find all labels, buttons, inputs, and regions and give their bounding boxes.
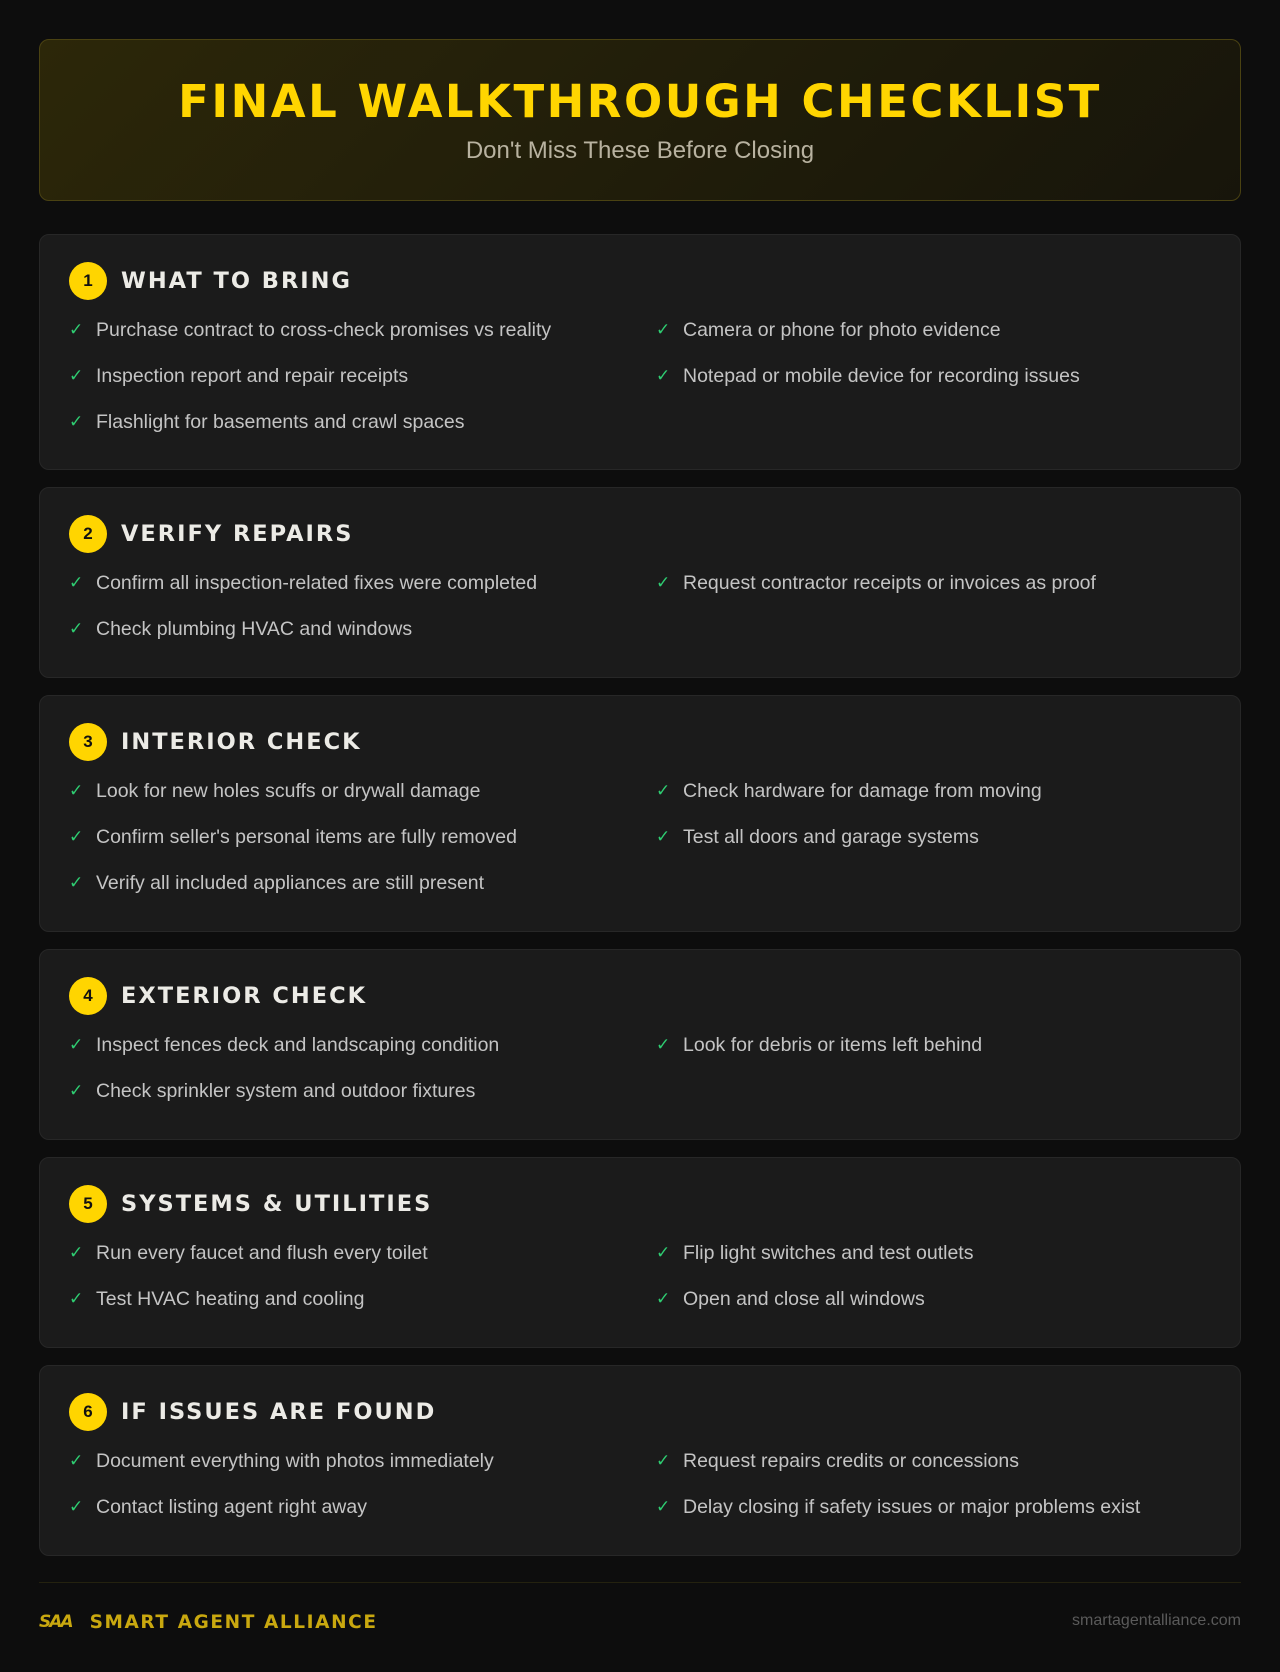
list 1: Flashlight for basements and crawl spaces xyxy=(96,410,465,432)
list 3: ✓ xyxy=(69,827,83,846)
footer brand: SMART AGENT ALLIANCE xyxy=(90,1612,378,1632)
list 3 xyxy=(69,780,1042,894)
list 1: ✓ xyxy=(656,366,670,385)
list 1: Camera or phone for photo evidence xyxy=(683,318,1001,340)
list 6: Contact listing agent right away xyxy=(96,1496,367,1518)
heading 4: EXTERIOR CHECK xyxy=(121,983,367,1009)
list 5: ✓ xyxy=(69,1243,83,1262)
footer xyxy=(39,1582,1241,1583)
list 4: ✓ xyxy=(69,1081,83,1100)
list 6: ✓ xyxy=(656,1497,670,1516)
list 3: Look for new holes scuffs or drywall damage xyxy=(96,780,480,802)
list 1 xyxy=(69,318,1080,432)
panel: systems & utilities xyxy=(39,1157,1241,1348)
heading 2 xyxy=(69,515,353,553)
list 3: ✓ xyxy=(656,781,670,800)
panel: if issues are found xyxy=(39,1365,1241,1556)
list 2: ✓ xyxy=(656,573,670,592)
list 2: ✓ xyxy=(69,619,83,638)
list 4: Check sprinkler system and outdoor fixtures xyxy=(96,1080,475,1102)
list 5: Open and close all windows xyxy=(683,1288,925,1310)
heading 5: 5 xyxy=(83,1194,93,1213)
list 3: Verify all included appliances are still present xyxy=(96,872,484,894)
list 6: Document everything with photos immediately xyxy=(96,1450,494,1472)
list 1: ✓ xyxy=(656,320,670,339)
list 1: Notepad or mobile device for recording issues xyxy=(683,364,1080,386)
heading 5 xyxy=(69,1185,432,1223)
heading 3: 3 xyxy=(83,732,93,751)
list 4: ✓ xyxy=(656,1035,670,1054)
list 2: ✓ xyxy=(69,573,83,592)
heading 1: WHAT TO BRING xyxy=(121,268,352,294)
heading 6 xyxy=(69,1393,436,1431)
list 2: Confirm all inspection-related fixes were completed xyxy=(96,572,537,594)
panel: exterior check xyxy=(39,949,1241,1140)
list 5: Test HVAC heating and cooling xyxy=(96,1288,364,1310)
list 3: ✓ xyxy=(69,873,83,892)
list 2: Request contractor receipts or invoices as proof xyxy=(683,572,1096,594)
list 4 xyxy=(69,1034,982,1102)
list 4: ✓ xyxy=(69,1035,83,1054)
list 5: Flip light switches and test outlets xyxy=(683,1242,973,1264)
header banner xyxy=(39,39,1241,201)
list 1: ✓ xyxy=(69,320,83,339)
list 6: Request repairs credits or concessions xyxy=(683,1450,1019,1472)
subtitle: Don't Miss These Before Closing xyxy=(466,137,814,164)
list 1: ✓ xyxy=(69,366,83,385)
heading 6: 6 xyxy=(83,1402,93,1421)
list 5: ✓ xyxy=(656,1243,670,1262)
list 3: Test all doors and garage systems xyxy=(683,826,979,848)
list 3: ✓ xyxy=(656,827,670,846)
list 6 xyxy=(69,1450,1140,1518)
heading 1 xyxy=(69,262,352,300)
list 5: ✓ xyxy=(69,1289,83,1308)
heading 1: 1 xyxy=(83,271,93,290)
list 3: Confirm seller's personal items are fully removed xyxy=(96,826,517,848)
list 3: ✓ xyxy=(69,781,83,800)
heading 2: 2 xyxy=(83,524,93,543)
list 6: ✓ xyxy=(69,1451,83,1470)
list 2 xyxy=(69,572,1096,640)
panel: verify repairs xyxy=(39,487,1241,678)
list 2: Check plumbing HVAC and windows xyxy=(96,618,412,640)
list 5: ✓ xyxy=(656,1289,670,1308)
list 4: Look for debris or items left behind xyxy=(683,1034,982,1056)
icon: logo: SAA xyxy=(39,1612,72,1632)
heading 4: 4 xyxy=(83,986,93,1005)
list 5 xyxy=(69,1242,973,1310)
heading 4 xyxy=(69,977,367,1015)
heading 5: SYSTEMS & UTILITIES xyxy=(121,1191,432,1217)
panel: what to bring xyxy=(39,234,1241,470)
heading 6: IF ISSUES ARE FOUND xyxy=(121,1399,436,1425)
panel: interior check xyxy=(39,695,1241,932)
list 1: Purchase contract to cross-check promises vs reality xyxy=(96,318,551,340)
list 5: Run every faucet and flush every toilet xyxy=(96,1242,428,1264)
footer url: smartagentalliance.com xyxy=(1072,1612,1241,1629)
list 6: ✓ xyxy=(69,1497,83,1516)
heading 3: INTERIOR CHECK xyxy=(121,729,362,755)
list 3: Check hardware for damage from moving xyxy=(683,780,1042,802)
heading 3 xyxy=(69,723,362,761)
list 1: ✓ xyxy=(69,412,83,431)
heading 2: VERIFY REPAIRS xyxy=(121,521,353,547)
list 1: Inspection report and repair receipts xyxy=(96,364,408,386)
list 4: Inspect fences deck and landscaping condition xyxy=(96,1034,499,1056)
title: FINAL WALKTHROUGH CHECKLIST xyxy=(178,75,1102,128)
list 6: ✓ xyxy=(656,1451,670,1470)
list 6: Delay closing if safety issues or major problems exist xyxy=(683,1496,1140,1518)
